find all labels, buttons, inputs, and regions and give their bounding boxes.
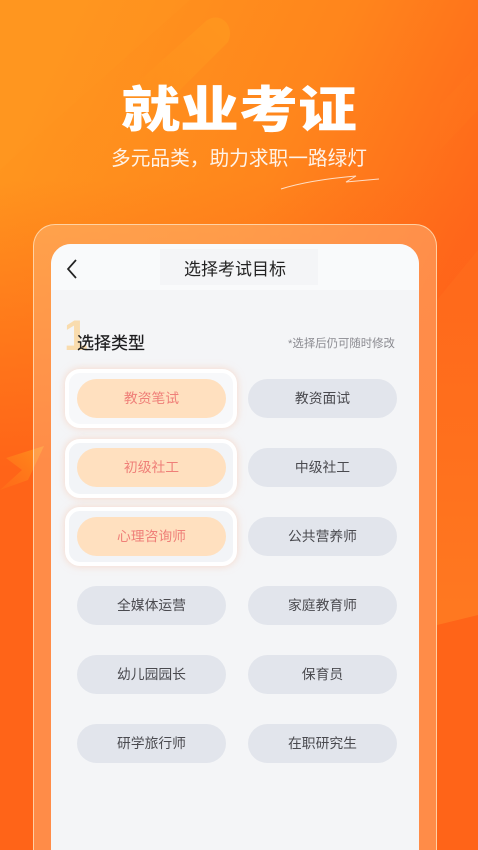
- option: 初级社工: 初级社工: [124, 460, 179, 475]
- subtitle: 多元品类，助力求职一路绿灯: [111, 148, 367, 170]
- option: 研学旅行师: 研学旅行师: [117, 736, 186, 751]
- phone mockup frame: [33, 224, 437, 850]
- option: 全媒体运营: [77, 586, 226, 625]
- option: 家庭教育师: 家庭教育师: [288, 598, 357, 613]
- selected frame: 教资笔试: [65, 369, 237, 428]
- back arrow icon: [66, 259, 77, 279]
- title: 就业考证: [121, 82, 357, 138]
- option: 保育员: 保育员: [302, 667, 343, 682]
- option: 教资笔试: 教资笔试: [124, 391, 179, 406]
- option: 心理咨询师: [77, 517, 226, 556]
- brush stroke underline: [280, 176, 379, 190]
- option: 教资面试: 教资面试: [295, 391, 350, 406]
- option: 保育员: [248, 655, 397, 694]
- screen title: 选择考试目标: [184, 260, 286, 279]
- screen header bar: [51, 244, 419, 290]
- option: 幼儿园园长: 幼儿园园长: [117, 667, 186, 682]
- option: 公共营养师: [248, 517, 397, 556]
- option: 家庭教育师: [248, 586, 397, 625]
- option: 中级社工: [248, 448, 397, 487]
- option: 在职研究生: 在职研究生: [288, 736, 357, 751]
- option: 初级社工: [77, 448, 226, 487]
- option: 在职研究生: [248, 724, 397, 763]
- option: 心理咨询师: 心理咨询师: [117, 529, 186, 544]
- section heading: 选择类型: [77, 334, 145, 353]
- selected frame: 心理咨询师: [65, 507, 237, 566]
- header title highlight: [160, 249, 318, 285]
- option: 教资面试: [248, 379, 397, 418]
- option: 全媒体运营: 全媒体运营: [117, 598, 186, 613]
- app screen panel: [51, 244, 419, 850]
- step number: 1: [64, 312, 88, 360]
- option: 教资笔试: [77, 379, 226, 418]
- option: 研学旅行师: [77, 724, 226, 763]
- hint text: *选择后仍可随时修改: [288, 338, 395, 350]
- option: 中级社工: 中级社工: [295, 460, 350, 475]
- option: 公共营养师: 公共营养师: [288, 529, 357, 544]
- option: 幼儿园园长: [77, 655, 226, 694]
- selected frame: 初级社工: [65, 439, 237, 498]
